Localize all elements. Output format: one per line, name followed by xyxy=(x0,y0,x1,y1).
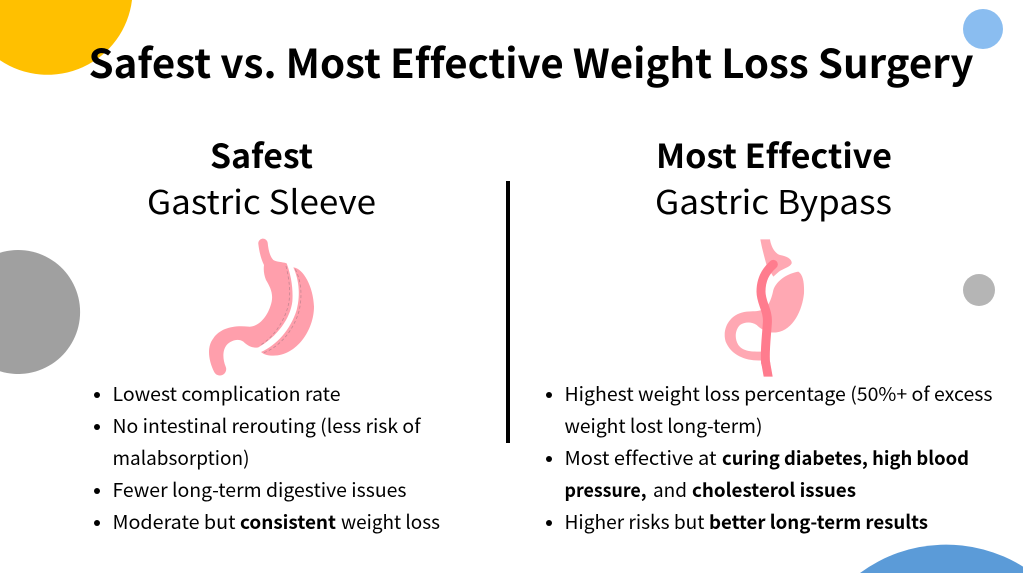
divider xyxy=(506,181,510,443)
blue bottom circle xyxy=(860,545,1023,573)
icon: gastric bypass stomach xyxy=(725,239,804,377)
panel: most effective xyxy=(546,130,993,535)
heading: safest: Safest xyxy=(210,130,313,178)
bullet 2: cholesterol issues xyxy=(692,476,856,503)
bullet 1 xyxy=(546,380,993,439)
subheading: gastric bypass: Gastric Bypass xyxy=(655,176,892,224)
bullet 2 xyxy=(546,444,969,503)
yellow corner circle xyxy=(0,0,132,75)
bullet 1: weight lost long-term) xyxy=(564,412,762,439)
bullet list: most effective xyxy=(546,380,993,535)
bullet list: safest xyxy=(94,380,440,535)
bullet 3 xyxy=(546,508,928,535)
bullet 2: and xyxy=(653,476,687,503)
bullet 3: better long-term results xyxy=(709,508,928,535)
bullet 4: consistent xyxy=(240,508,336,535)
bullet 2: curing diabetes, high blood xyxy=(722,444,969,471)
bullet 3: Higher risks but xyxy=(564,508,704,535)
bullet 2: malabsorption) xyxy=(112,444,250,471)
bullet 1: Lowest complication rate xyxy=(112,380,340,407)
bullet 4: Moderate but xyxy=(112,508,236,535)
bullet 2: No intestinal rerouting (less risk of xyxy=(112,412,421,439)
icon: gastric sleeve stomach xyxy=(209,239,314,376)
small gray circle xyxy=(963,274,995,306)
large gray circle xyxy=(0,250,80,374)
small blue circle xyxy=(963,9,1003,49)
panel: safest xyxy=(94,130,440,535)
bullet 2: pressure, xyxy=(564,476,646,503)
bullet 1: Highest weight loss percentage (50%+ of excess xyxy=(564,380,993,407)
bullet 3: Fewer long-term digestive issues xyxy=(112,476,407,503)
bullet 2: Most effective at xyxy=(564,444,716,471)
subheading: gastric sleeve: Gastric Sleeve xyxy=(147,176,376,224)
bullet 4 xyxy=(94,508,440,535)
bullet 4: weight loss xyxy=(341,508,440,535)
bullet 2 xyxy=(94,412,421,471)
title: Safest vs. Most Effective Weight Loss Surgery xyxy=(88,32,974,90)
heading: most effective: Most Effective xyxy=(656,130,892,178)
